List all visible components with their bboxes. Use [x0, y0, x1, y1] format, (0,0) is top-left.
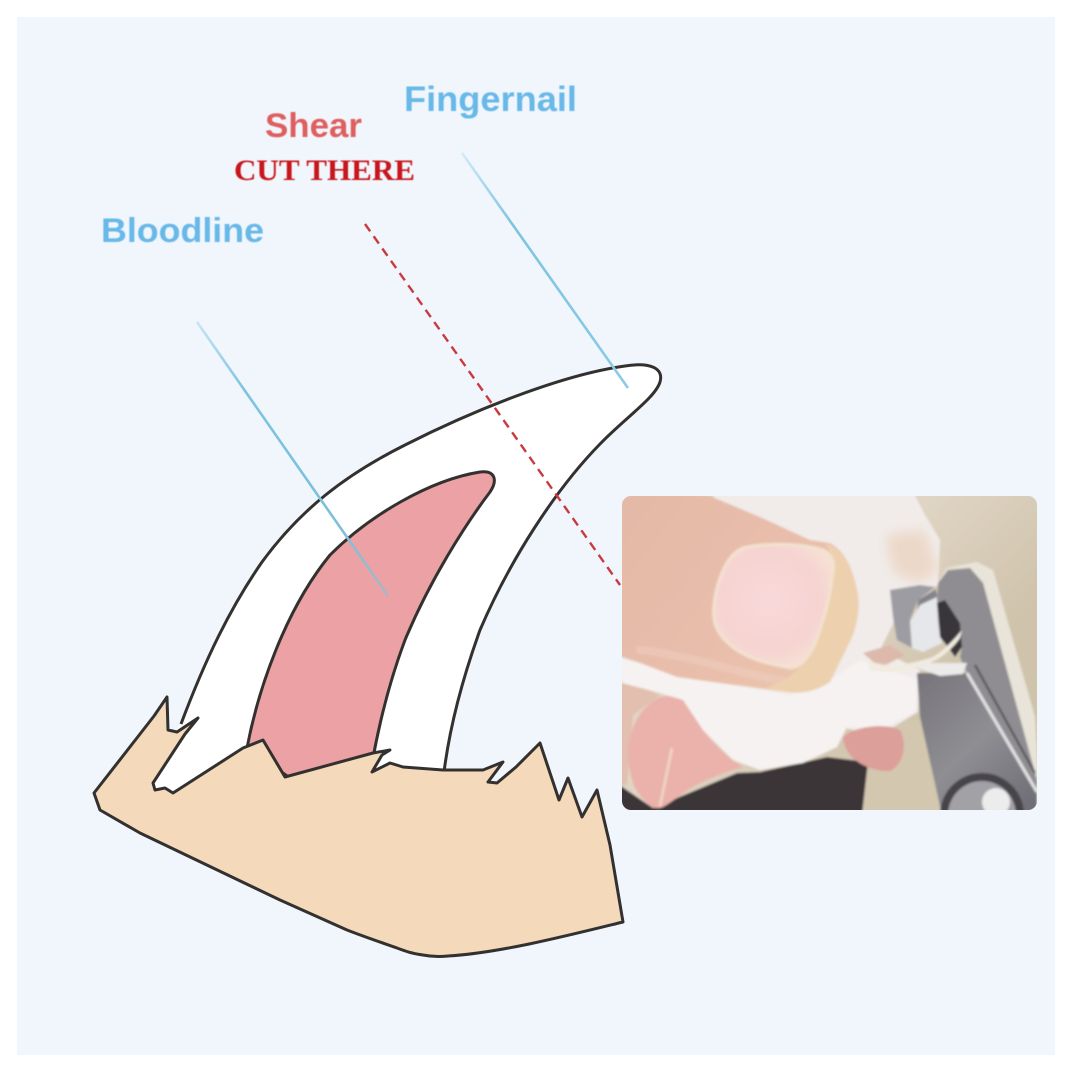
left skin behind lower finger: [622, 682, 659, 786]
lower finger nail streak: [660, 748, 672, 806]
heading: Fingernail: Fingernail: [404, 80, 577, 119]
clipper bright neck: [917, 663, 967, 676]
clipper bright edge: [938, 562, 1040, 810]
dashed cut line: [365, 224, 620, 585]
text: CUT THERE: CUT THERE: [234, 154, 415, 187]
lower finger: [628, 696, 743, 808]
lower wall: [860, 720, 960, 815]
second fingertip: [843, 726, 904, 771]
tan fur patch: [885, 530, 938, 583]
clipper channel: [975, 665, 1035, 773]
white fur upper: [700, 490, 940, 735]
white fur lower: [622, 657, 847, 771]
thumb tip band: [765, 543, 859, 693]
thumbnail: [714, 544, 834, 668]
thumb lower ridge highlight: [640, 650, 790, 682]
heading: Shear: Shear: [265, 107, 362, 145]
pointer line: fingernail: [462, 153, 628, 388]
dark lower area: [615, 757, 868, 815]
paw skin with fur edge: [94, 697, 623, 956]
clipper head bright ring: [910, 597, 942, 652]
rivet: [939, 772, 1024, 810]
heading: Bloodline: Bloodline: [101, 212, 264, 250]
pointer line: bloodline: [197, 322, 388, 596]
illustration: claw: [94, 365, 661, 956]
photo: trimming a cat's claw: [622, 496, 1037, 810]
claw white fill: [150, 365, 661, 795]
cat claw in clipper: [868, 630, 962, 672]
claw outline: [181, 365, 661, 772]
clipper lower body: [917, 673, 1037, 815]
clipper head shadow: [916, 588, 938, 610]
clipper hole: [937, 600, 962, 657]
flesh at claw base: [863, 646, 904, 666]
photo background: [615, 490, 1045, 815]
clipper upper arm: [937, 568, 1037, 800]
quick: pink bloodline area: [247, 472, 494, 785]
clipper white line: [967, 673, 1037, 792]
background cover below claw: [145, 792, 180, 800]
thumb: [622, 496, 847, 691]
clipper head grey: [890, 585, 935, 648]
